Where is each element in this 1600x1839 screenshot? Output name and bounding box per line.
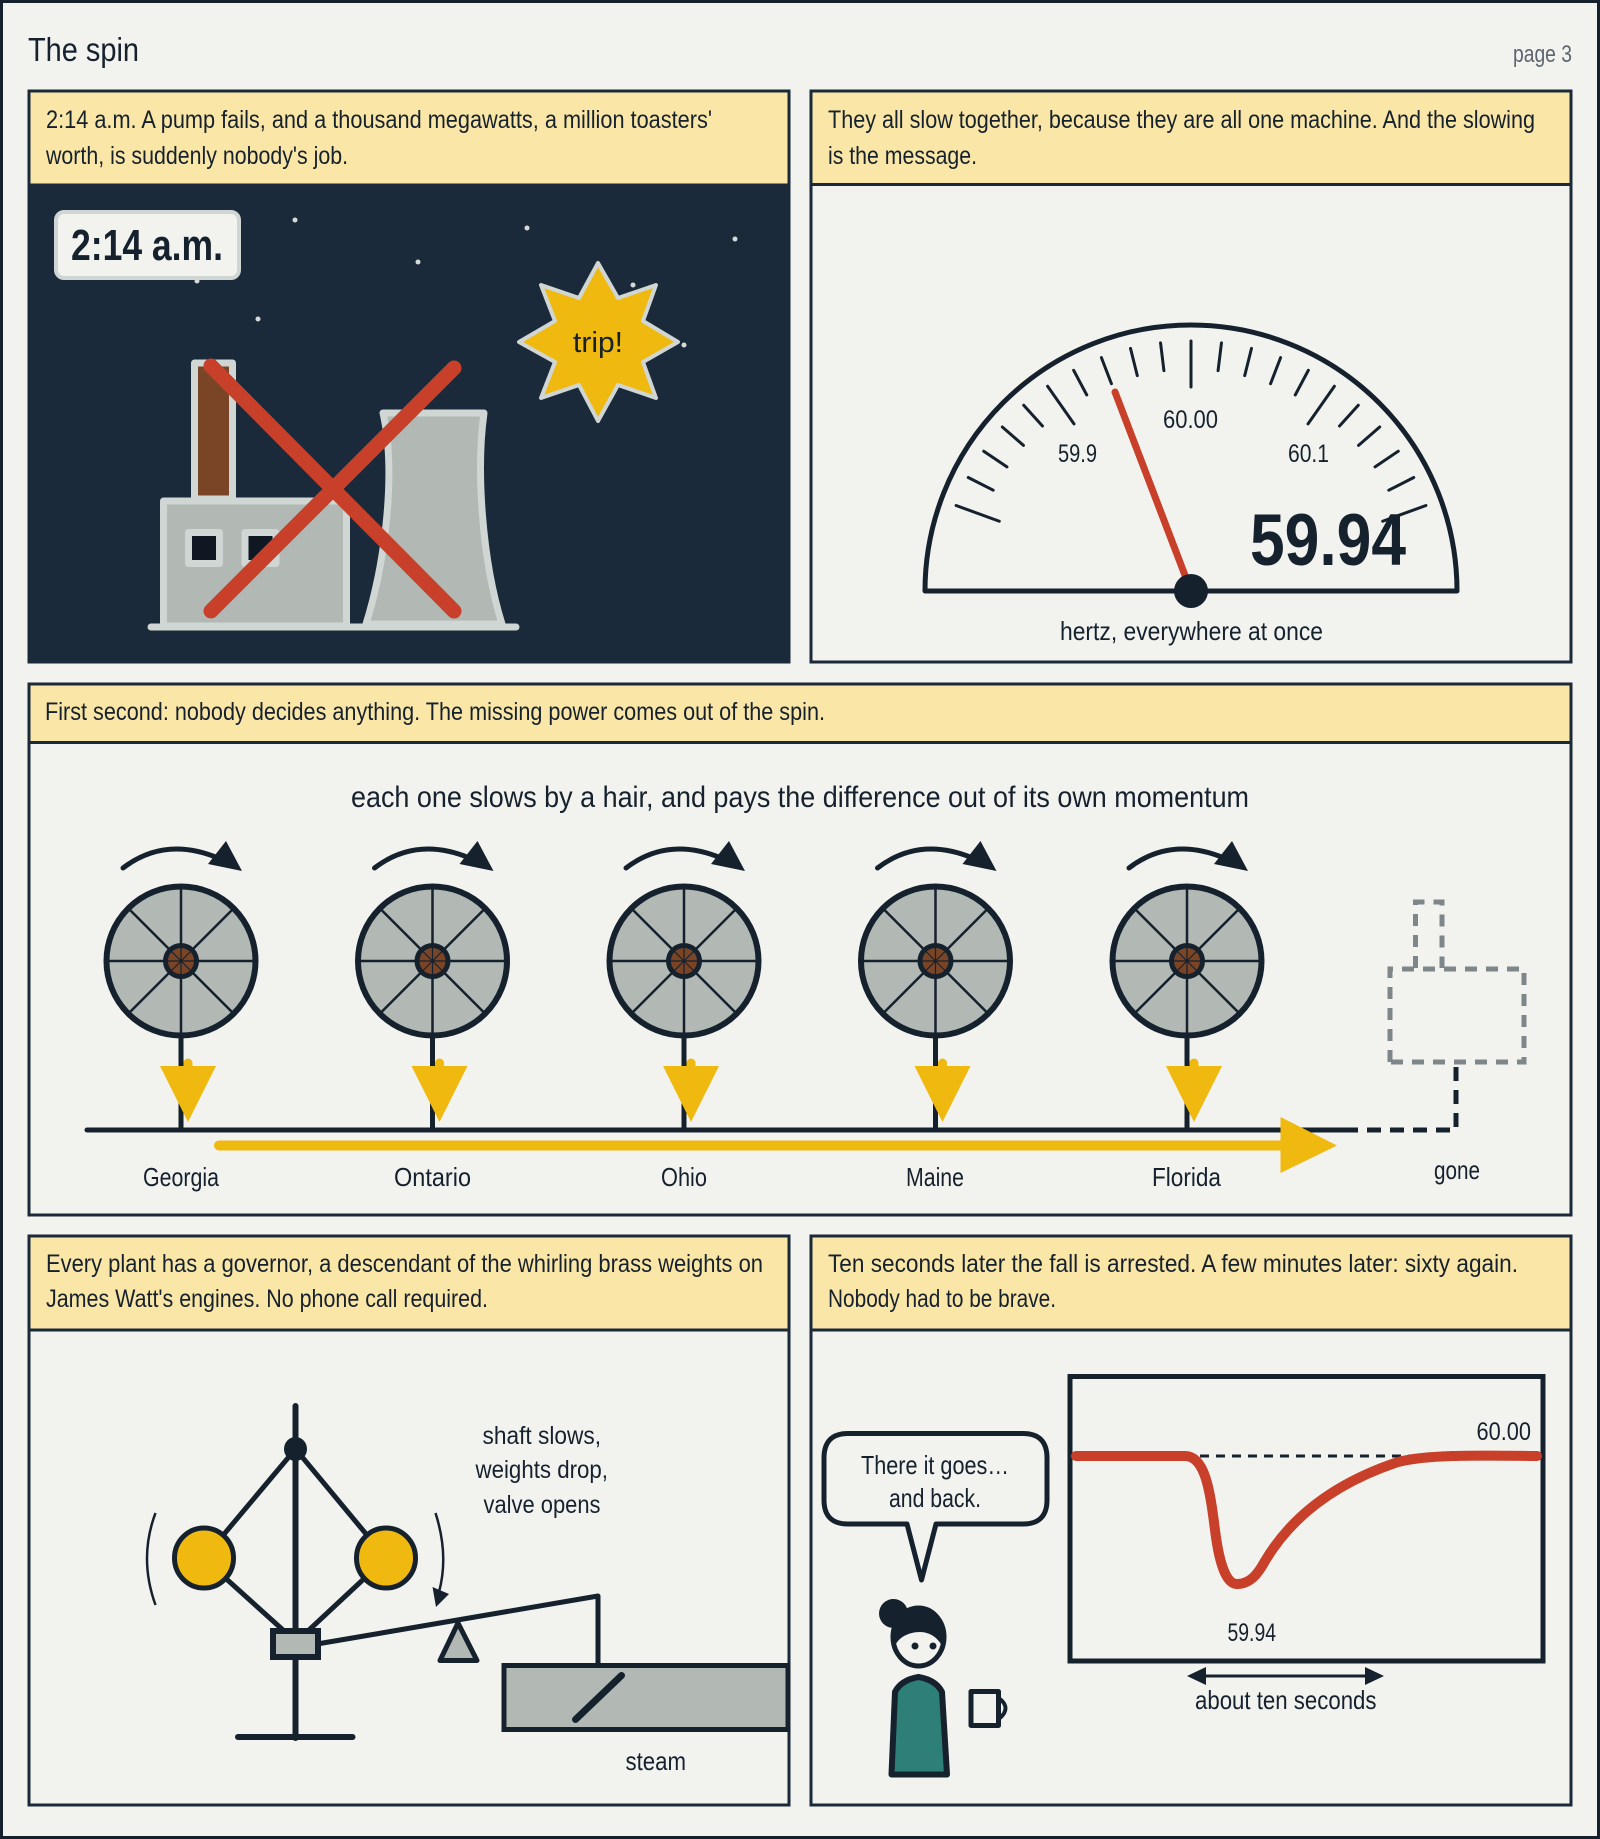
caption: recovery: Nobody had to be brave. — [828, 1285, 1056, 1313]
clock label: 2:14 a.m. — [71, 221, 223, 270]
gauge scale labels: 60.1 — [1288, 440, 1329, 468]
panel: recovery — [811, 1236, 1571, 1805]
generator: Georgia — [106, 841, 256, 1192]
note: shaft slows: shaft slows, — [482, 1422, 601, 1450]
generator: Ohio: Ohio — [661, 1162, 707, 1192]
caption: pump fails — [30, 92, 788, 184]
subtitle: each one slows by a hair, and pays the difference out of its own momentum — [351, 781, 1249, 814]
generator: Florida: Florida — [1152, 1162, 1221, 1192]
note: shaft slows: valve opens — [484, 1491, 600, 1519]
governor mechanism — [174, 1406, 416, 1738]
caption: governor: James Watt's engines. No phone call required. — [46, 1285, 488, 1313]
note: shaft slows: weights drop, — [475, 1456, 608, 1484]
gauge ticks — [956, 341, 1426, 521]
page number: page 3 — [1513, 41, 1572, 68]
grid line — [87, 1062, 1456, 1130]
arrow: weights drop — [432, 1587, 449, 1607]
panel: governor — [29, 1236, 789, 1805]
caption: first second — [29, 686, 1571, 742]
character with mug — [879, 1599, 1006, 1774]
speech bubble: and back. — [889, 1483, 981, 1513]
caption: one machine — [811, 92, 1571, 184]
caption: recovery: Ten seconds later the fall is arrested. A few minutes later: sixty again. — [828, 1250, 1518, 1278]
caption: governor: Every plant has a governor, a descendant of the whirling brass weights on — [46, 1250, 763, 1278]
generator: Florida — [1112, 841, 1262, 1192]
starburst: trip — [519, 263, 678, 421]
gauge reading: 59.94 — [1250, 500, 1406, 581]
icon: red cross — [211, 366, 454, 611]
generator: Maine — [861, 841, 1010, 1192]
arrow: duration: about ten seconds — [1195, 1685, 1376, 1715]
generator: Ohio — [610, 841, 758, 1192]
caption: pump fails: 2:14 a.m. A pump fails, and a thousand megawatts, a million toasters' — [46, 106, 712, 134]
caption: first second: First second: nobody decides anything. The missing power comes out of the spin. — [45, 698, 825, 726]
starburst: trip: trip! — [573, 327, 623, 359]
motion arcs — [147, 1513, 443, 1605]
line chart: frequency dip: 59.94 — [1228, 1619, 1276, 1647]
clock label — [56, 212, 239, 278]
ghost plant: gone: gone — [1434, 1155, 1480, 1185]
panel: frequency gauge — [811, 91, 1571, 662]
panel: the trip at 2:14 a.m. — [29, 91, 789, 662]
generator: Ontario — [358, 841, 507, 1192]
gauge scale labels — [1058, 406, 1329, 468]
gauge dial — [925, 325, 1457, 591]
stars — [194, 218, 738, 348]
caption: one machine: is the message. — [828, 142, 977, 170]
speech bubble — [824, 1434, 1047, 1580]
generator: Ontario: Ontario — [394, 1162, 471, 1192]
generator: Georgia: Georgia — [143, 1162, 219, 1192]
gauge caption: hertz, everywhere at once — [1060, 616, 1323, 646]
title: The spin — [28, 31, 139, 68]
steam valve pipe — [504, 1666, 788, 1730]
speech bubble: There it goes… — [861, 1450, 1009, 1480]
generator: Maine: Maine — [906, 1162, 964, 1192]
gauge scale labels: 60.00 — [1163, 406, 1218, 434]
gauge scale labels: 59.9 — [1058, 440, 1097, 468]
caption: pump fails: worth, is suddenly nobody's job. — [45, 142, 348, 170]
lever and fulcrum — [320, 1596, 598, 1665]
caption: governor — [29, 1238, 789, 1330]
caption: recovery — [811, 1238, 1571, 1330]
arrow: power flow along the grid — [219, 1117, 1337, 1173]
note: shaft slows — [475, 1422, 608, 1519]
line chart: frequency dip — [1070, 1376, 1543, 1661]
label: steam: steam — [626, 1746, 686, 1776]
arrow: duration — [1187, 1667, 1384, 1715]
ghost plant: gone — [1390, 902, 1524, 1185]
panel: spinning generators — [29, 684, 1571, 1215]
gauge needle — [1115, 392, 1208, 608]
line chart: frequency dip: 60.00 — [1476, 1418, 1531, 1446]
icon: power plant — [151, 363, 516, 627]
